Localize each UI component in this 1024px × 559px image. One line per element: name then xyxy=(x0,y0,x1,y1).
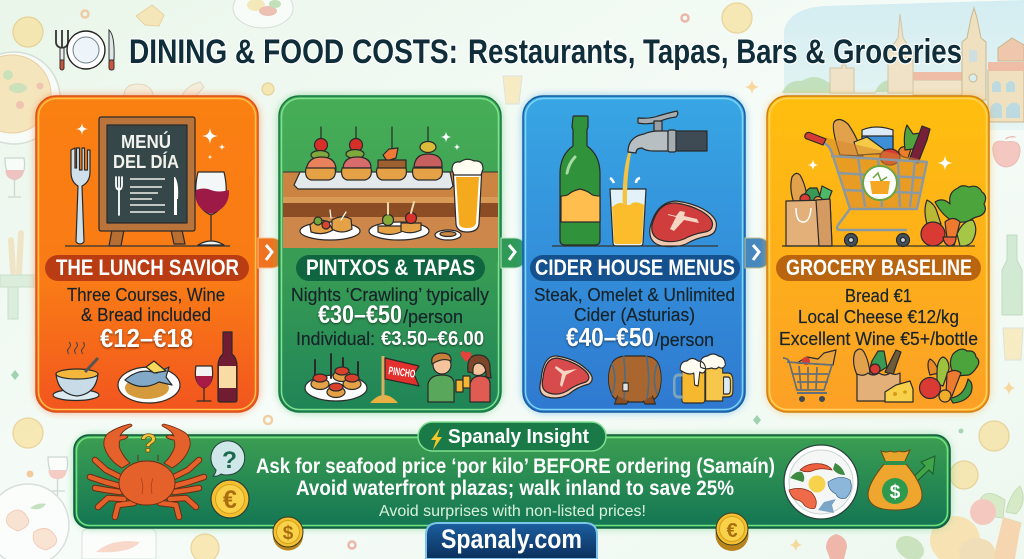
icon: pincho flag xyxy=(370,356,419,403)
text block: Three Courses, Wine xyxy=(67,284,225,305)
arrow: card 3 to 4 xyxy=(745,238,771,268)
icon: beer mugs xyxy=(674,354,733,403)
text block: Individual: xyxy=(296,328,375,349)
icon: menu chalkboard: MENÚ xyxy=(121,131,171,152)
insight badge: Spanaly Insight xyxy=(448,426,589,448)
icon: steak small xyxy=(540,356,592,398)
icon: question bubble: ? xyxy=(222,447,237,474)
price xyxy=(566,322,714,352)
bar counter xyxy=(283,172,498,248)
text block: Avoid waterfront plazas; walk inland to save 25% xyxy=(296,477,734,500)
text block xyxy=(779,285,978,349)
text block xyxy=(67,284,225,325)
bread and peach xyxy=(124,82,204,98)
icon: dollar coin: $ xyxy=(283,523,294,544)
icon: produce xyxy=(920,349,979,403)
cheese xyxy=(136,5,164,26)
icon: money bag with arrow: $ xyxy=(890,482,901,503)
title: DINING & FOOD COSTS: xyxy=(129,33,458,71)
heading: THE LUNCH SAVIOR xyxy=(56,255,239,280)
breadsticks and table xyxy=(11,233,21,273)
ground line xyxy=(782,245,975,247)
arrow: card 2 to 3 xyxy=(501,238,527,268)
text block: & Bread included xyxy=(81,304,211,325)
icon: lightning bolt xyxy=(431,428,442,450)
title xyxy=(56,30,962,71)
icon: t-bone steak xyxy=(650,201,716,247)
icon: seafood plate xyxy=(784,445,858,519)
sparkles xyxy=(76,123,226,160)
text block: Cider (Asturias) xyxy=(574,304,695,325)
ground line xyxy=(65,245,230,247)
heading: GROCERY BASELINE xyxy=(786,255,972,280)
text block: €3.50–€6.00 xyxy=(381,328,484,350)
icon: beer glass xyxy=(452,159,483,232)
tray xyxy=(294,172,453,189)
plates with tapas xyxy=(300,202,461,240)
price: €40–€50 xyxy=(566,322,654,352)
rings and dots xyxy=(82,10,688,548)
heading: PINTXOS & TAPAS xyxy=(306,255,475,280)
text block xyxy=(534,284,735,325)
heading xyxy=(283,248,498,281)
seafood plate xyxy=(0,484,69,559)
icon: wine bottle xyxy=(218,332,237,402)
panel: the lunch savior xyxy=(34,94,260,414)
beer glasses xyxy=(503,76,1023,360)
icon: cider glass xyxy=(610,153,646,246)
icon: fork xyxy=(71,148,90,244)
icon: question bubble xyxy=(211,441,245,476)
icon: soup bowl xyxy=(53,342,99,400)
icon: crab with question mark: ? xyxy=(140,428,157,458)
icon: pincho flag: PINCHO xyxy=(388,365,416,381)
text block: Local Cheese €12/kg xyxy=(798,306,959,327)
top plate xyxy=(233,0,293,28)
ground line xyxy=(552,245,718,247)
pintxos row xyxy=(306,127,442,180)
wine glasses xyxy=(5,158,68,496)
sparkles xyxy=(808,156,952,170)
text block: Avoid surprises with non-listed prices! xyxy=(379,503,646,520)
insight badge xyxy=(418,422,606,451)
text block: Bread €1 xyxy=(845,285,912,306)
icon: fork plate knife xyxy=(56,30,114,70)
sparkles xyxy=(745,80,1015,552)
panel: cider house menus xyxy=(521,94,747,414)
icon: menu chalkboard xyxy=(99,117,195,246)
panel: pintxos and tapas xyxy=(277,94,503,414)
text block: Excellent Wine €5+/bottle xyxy=(779,328,978,349)
icon: grocery bag and cheese xyxy=(854,349,913,402)
sparkles xyxy=(440,132,460,150)
text block: /person xyxy=(403,306,463,327)
icon: money bag with arrow xyxy=(868,450,935,510)
text block xyxy=(291,284,490,350)
text block: Ask for seafood price ‘por kilo’ BEFORE ordering (Samaín) xyxy=(256,455,775,478)
icon: two friends with beers xyxy=(428,351,491,402)
icon: euro coin lower: € xyxy=(726,520,738,542)
apple xyxy=(993,136,1020,167)
price: €12–€18 xyxy=(100,323,193,353)
text block: Nights ‘Crawling’ typically xyxy=(291,284,490,305)
heading: CIDER HOUSE MENUS xyxy=(535,255,735,280)
vegetables xyxy=(826,486,1023,559)
icon: euro coin: € xyxy=(223,486,237,514)
icon: fish plate xyxy=(118,361,180,403)
text block: €30–€50 xyxy=(318,301,402,329)
panel: spanaly insight xyxy=(72,422,952,530)
arrow: card 1 to 2 xyxy=(258,238,284,268)
icon: shopping cart xyxy=(805,120,930,246)
price: /person xyxy=(655,329,714,350)
salmon tray xyxy=(82,529,156,559)
text block xyxy=(256,455,775,520)
icon: barrel xyxy=(608,356,661,404)
icon: cider bottle xyxy=(560,116,600,245)
icon: menu chalkboard: DEL DÍA xyxy=(113,151,179,172)
icon: crab with question mark xyxy=(90,424,204,517)
skyline xyxy=(782,0,1024,130)
icon: wine glass xyxy=(196,172,229,245)
panel: grocery baseline xyxy=(765,94,991,414)
icon: pintxo plate xyxy=(305,354,367,401)
icon: vegetables xyxy=(921,186,986,246)
icon: dollar coin xyxy=(273,517,303,550)
text block: Steak, Omelet & Unlimited xyxy=(534,284,735,305)
plate of paella xyxy=(0,52,60,144)
icon: small wine xyxy=(195,366,213,401)
icon: paper bag xyxy=(786,173,832,246)
icon: euro coin xyxy=(211,480,249,518)
icon: small cart xyxy=(783,350,836,402)
bottle right xyxy=(1002,235,1022,315)
footer: website badge: Spanaly.com xyxy=(441,524,582,554)
icon: tap xyxy=(628,111,707,153)
icon: euro coin lower xyxy=(716,513,748,551)
